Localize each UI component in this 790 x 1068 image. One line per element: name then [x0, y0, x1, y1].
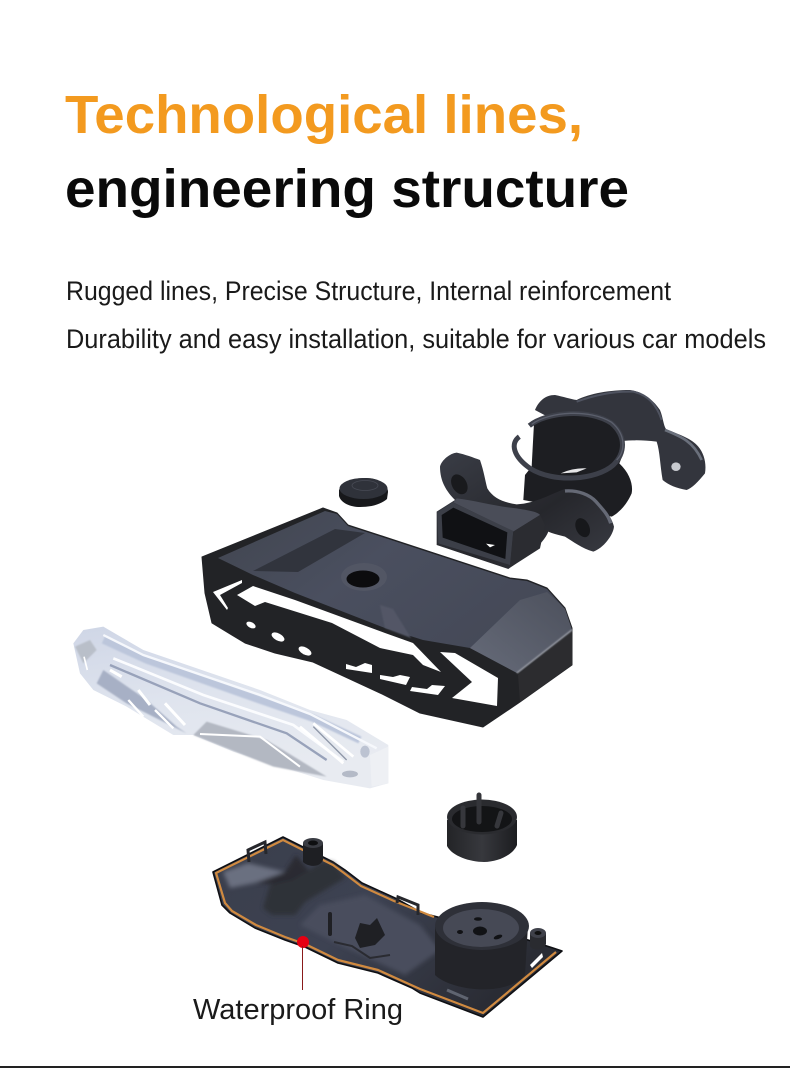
title: Technological lines, [65, 85, 583, 145]
upright pin [328, 914, 332, 934]
clip base arc [334, 942, 390, 958]
plate surfaces [223, 855, 440, 975]
dark chamfer band [253, 529, 365, 572]
screw hole [341, 563, 387, 591]
title [65, 85, 629, 219]
ring [514, 414, 622, 478]
rear clamp bracket [514, 390, 705, 517]
subtitle text [66, 276, 766, 354]
rubber cap [339, 478, 388, 507]
base plate with waterproof ring [213, 837, 562, 1017]
slot highlight [530, 953, 543, 968]
base plate [213, 837, 562, 1017]
main housing body [202, 508, 572, 727]
tube [523, 415, 632, 517]
subtitle text: Durability and easy installation, suitable for various car models [66, 324, 766, 354]
clip tabs [248, 842, 418, 915]
white gap [561, 468, 587, 473]
screw post [303, 838, 323, 866]
light chamfer patch [470, 592, 572, 673]
bottom edge line [0, 1066, 790, 1068]
clip detail [355, 918, 385, 948]
knob [447, 795, 517, 862]
callout: waterproof ring [193, 936, 403, 1026]
callout: waterproof ring: Waterproof Ring [193, 994, 403, 1026]
lens body [73, 627, 388, 788]
right end face [518, 632, 572, 702]
subtitle text: Rugged lines, Precise Structure, Internal reinforcement [66, 276, 671, 306]
housing front face [202, 508, 572, 727]
housing top face [218, 511, 572, 673]
clear lens [73, 627, 388, 788]
rear clamp band [535, 390, 705, 490]
white cut-outs [213, 580, 498, 706]
title: engineering structure [65, 159, 629, 219]
small screw hole [530, 928, 546, 950]
lens highlights [75, 640, 360, 777]
front clamp bracket [437, 453, 614, 569]
cylinder boss [435, 902, 529, 989]
orange sealing ring [216, 840, 556, 1013]
plate foot highlight [447, 990, 468, 999]
